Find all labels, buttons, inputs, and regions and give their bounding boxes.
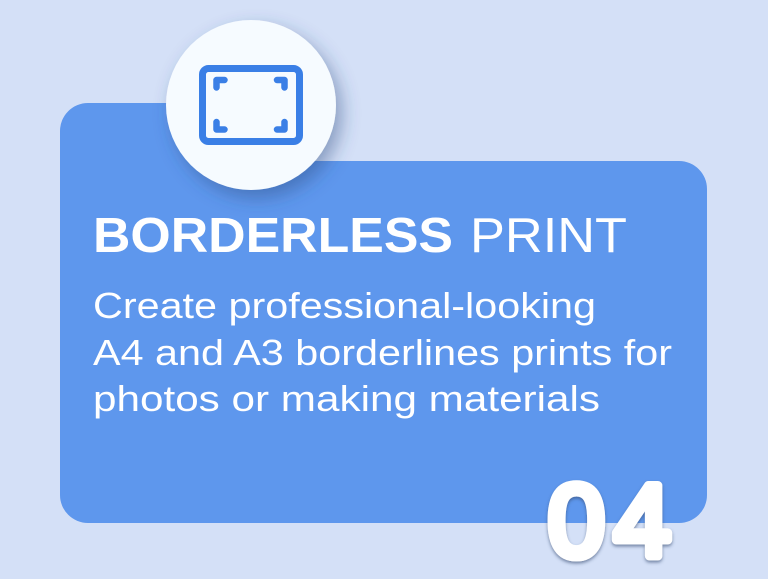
body text: Create professional-looking [93, 285, 596, 326]
body text: photos or making materials [93, 378, 600, 419]
body text: A4 and A3 borderlines prints for [93, 332, 672, 373]
heading: PRINT [470, 209, 627, 263]
number 04: 4 [614, 464, 671, 578]
number 04: 0 [548, 464, 605, 578]
body text [93, 285, 672, 419]
panel: blue card [60, 103, 707, 523]
icon: white circle with borderless frame [166, 20, 336, 190]
heading: BORDERLESS [93, 209, 453, 263]
